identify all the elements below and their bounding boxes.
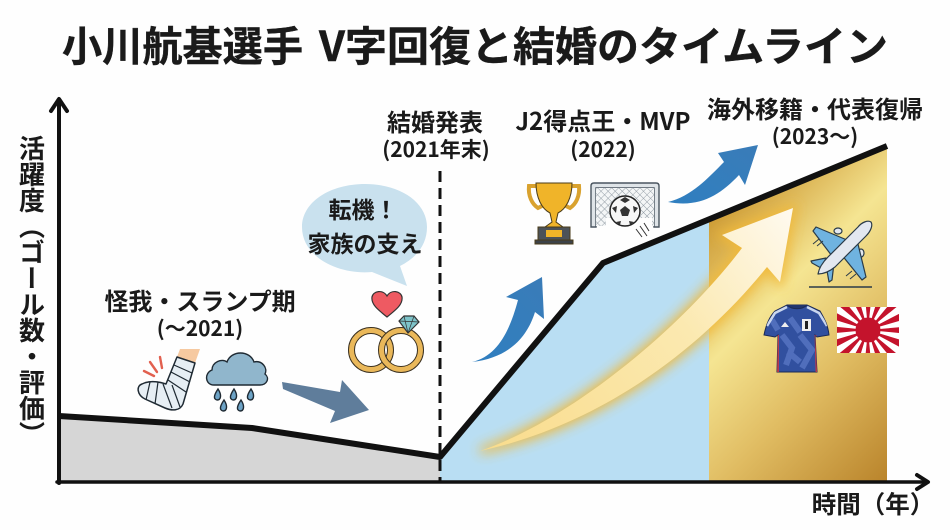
label: slump period: 怪我・スランプ期 [104,282,296,317]
x axis [57,475,928,489]
label: J2 top scorer [515,102,691,164]
arrow: golden rising arrow [480,208,793,451]
y axis label: 活躍度（ゴール数・評価） [14,135,50,447]
title: V字回復と結婚のタイムライン [318,13,888,73]
arrow: blue rise 1 [472,277,544,362]
title [62,13,888,73]
line: activity trend [59,146,887,457]
arrow: blue rise 2 [668,145,758,203]
icon: trophy [529,183,579,244]
icon: bandaged leg [138,349,200,410]
label: J2 top scorer: J2得点王・MVP [515,102,691,137]
icon: national team jersey [764,305,829,372]
label: marriage announcement: (2021年末) [382,134,490,164]
label: overseas transfer [707,90,923,151]
label: slump period [104,282,296,343]
divider: marriage announcement [438,171,442,481]
icon: wedding rings [352,316,420,370]
icon: rising sun flag [837,307,899,353]
speech bubble [302,184,427,286]
speech bubble: 転機！ [328,191,398,225]
area: golden period [709,146,887,482]
arrow: downward slump [282,380,369,423]
area: slump period [59,416,440,482]
area: growth period [440,219,709,482]
label: marriage announcement [382,103,490,164]
title: 小川航基選手 [62,13,303,73]
label: slump period: (～2021) [157,313,243,343]
icon: heart [372,292,402,317]
speech bubble: 家族の支え [308,225,422,259]
x axis label: 時間（年） [812,486,934,521]
icon: rain cloud [207,353,267,411]
label: J2 top scorer: (2022) [570,134,636,164]
icon: soccer goal [591,183,659,237]
label: marriage announcement: 結婚発表 [387,103,483,138]
y axis [51,99,67,483]
label: overseas transfer: (2023～) [772,121,858,151]
icon: airplane [809,221,872,287]
label: overseas transfer: 海外移籍・代表復帰 [707,90,923,125]
